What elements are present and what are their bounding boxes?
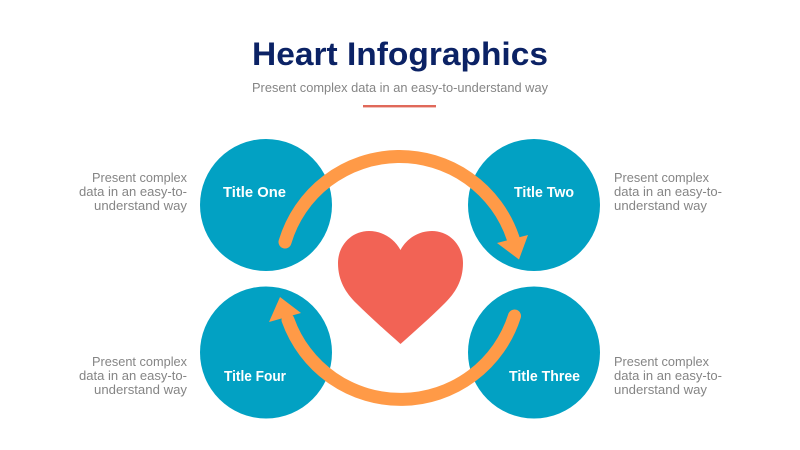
text block: bottom left: data in an easy-to-: [79, 368, 187, 383]
arrow: top, title one to title two: [285, 157, 528, 260]
text block: top right: [614, 170, 722, 213]
text block: bottom right: understand way: [614, 382, 708, 397]
text block: bottom left: [79, 354, 188, 397]
subtitle: Present complex data in an easy-to-understand way: [252, 80, 548, 95]
text block: top left: understand way: [94, 198, 188, 213]
text block: bottom right: [614, 354, 722, 397]
title: Heart Infographics: [252, 36, 548, 72]
text block: top left: data in an easy-to-: [79, 184, 187, 199]
arrow: bottom, title three to title four: [269, 297, 514, 399]
icon: heart: [338, 231, 463, 344]
panel: title two circle: Title Two: [514, 184, 574, 201]
panel: title three circle: Title Three: [509, 368, 580, 385]
panel: title four circle: Title Four: [224, 368, 286, 385]
text block: bottom left: Present complex: [92, 354, 187, 369]
text block: top right: data in an easy-to-: [614, 184, 722, 199]
panel: title one circle: [200, 139, 332, 271]
text block: top left: [79, 170, 188, 213]
text block: bottom left: understand way: [94, 382, 188, 397]
text block: top right: Present complex: [614, 170, 709, 185]
panel: title four circle: [200, 286, 332, 418]
text block: top right: understand way: [614, 198, 708, 213]
text block: top left: Present complex: [92, 170, 187, 185]
panel: title one circle: Title One: [223, 184, 286, 201]
panel: title two circle: [468, 139, 600, 271]
text block: bottom right: data in an easy-to-: [614, 368, 722, 383]
panel: title three circle: [468, 286, 600, 418]
title underline: [363, 105, 436, 107]
text block: bottom right: Present complex: [614, 354, 709, 369]
